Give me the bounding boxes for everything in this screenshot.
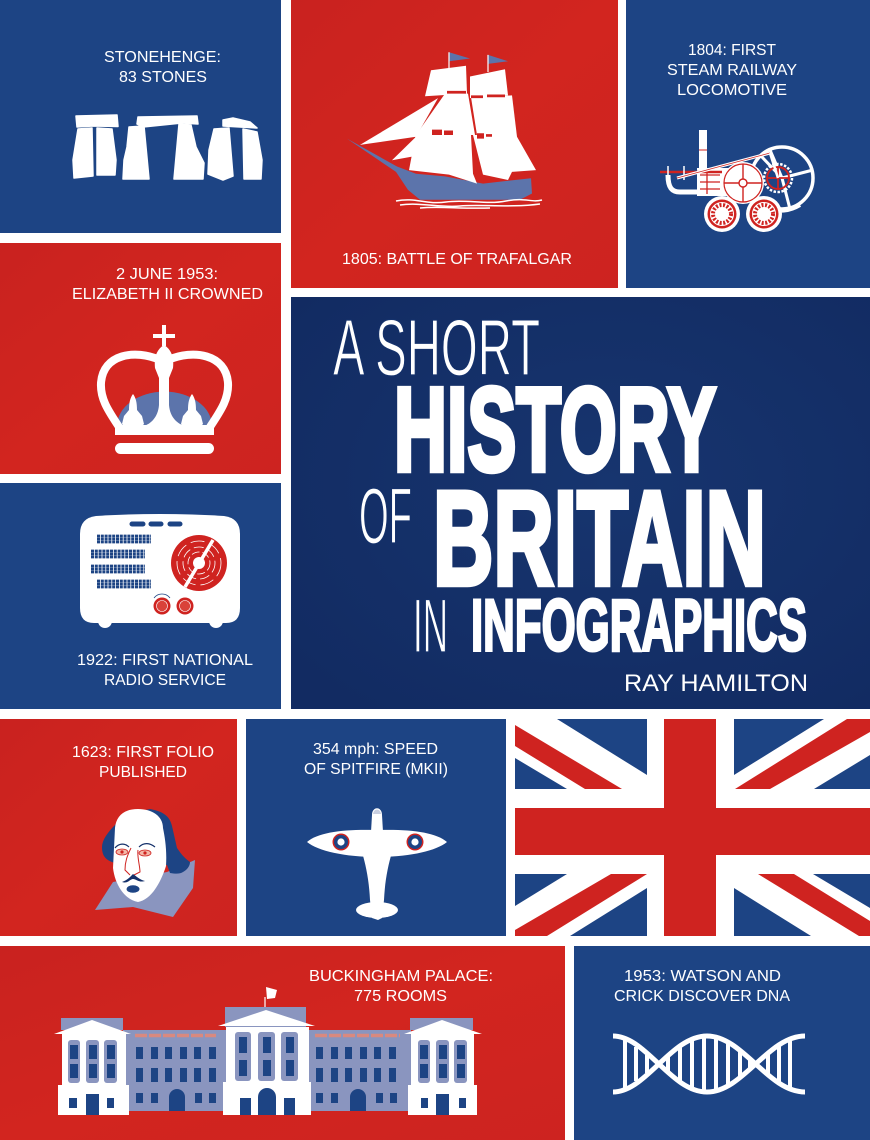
panel: Battle of Trafalgar	[291, 0, 618, 288]
title: A SHORT	[333, 303, 540, 392]
panel: Spitfire	[246, 719, 506, 936]
heading: DNA	[614, 968, 790, 1005]
icon: radio	[80, 514, 240, 628]
heading: Spitfire: OF SPITFIRE (MKII)	[304, 761, 448, 778]
panel: title	[291, 297, 870, 709]
heading: DNA: CRICK DISCOVER DNA	[614, 988, 790, 1005]
heading: radio	[77, 652, 253, 689]
heading: Spitfire	[304, 741, 448, 778]
title: IN	[413, 584, 448, 669]
heading: radio: 1922: FIRST NATIONAL	[77, 652, 253, 669]
heading: locomotive: 1804: FIRST	[688, 42, 776, 59]
icon: crown	[101, 325, 228, 454]
heading: folio	[72, 744, 214, 781]
heading: coronation	[72, 266, 263, 303]
panel: First Folio	[0, 719, 237, 936]
panel: Union Jack flag	[515, 719, 870, 936]
panel: steam locomotive	[626, 0, 870, 288]
heading: DNA: 1953: WATSON AND	[624, 968, 781, 985]
heading: coronation: ELIZABETH II CROWNED	[72, 286, 263, 303]
red crosses	[515, 719, 870, 936]
heading: locomotive: STEAM RAILWAY	[667, 62, 797, 79]
heading: folio: PUBLISHED	[99, 764, 187, 781]
panel: Stonehenge	[0, 0, 281, 233]
icon: DNA helix	[613, 1036, 805, 1092]
icon: Spitfire plane	[307, 808, 447, 920]
heading: folio: 1623: FIRST FOLIO	[72, 744, 214, 761]
author: RAY HAMILTON	[624, 670, 808, 697]
heading: palace: BUCKINGHAM PALACE:	[309, 968, 493, 985]
icon: Stonehenge stones	[73, 115, 262, 180]
heading: palace	[309, 968, 493, 1005]
panel: coronation	[0, 243, 281, 474]
heading: radio: RADIO SERVICE	[104, 672, 226, 689]
heading: locomotive	[667, 42, 797, 99]
panel: DNA	[574, 946, 870, 1140]
heading: palace: 775 ROOMS	[354, 988, 447, 1005]
heading: Stonehenge: STONEHENGE:	[104, 49, 221, 66]
blue fields	[515, 719, 870, 936]
heading: coronation: 2 JUNE 1953:	[116, 266, 218, 283]
heading: Trafalgar: 1805: BATTLE OF TRAFALGAR	[342, 251, 572, 268]
panel: Buckingham Palace	[0, 946, 565, 1140]
panel: radio	[0, 483, 281, 709]
icon: waves	[396, 200, 542, 208]
heading: locomotive: LOCOMOTIVE	[677, 82, 787, 99]
title: OF	[359, 471, 412, 560]
icon: locomotive	[660, 130, 813, 232]
icon: sailing ship	[347, 52, 536, 200]
icon: Shakespeare	[95, 809, 195, 917]
heading: Stonehenge	[104, 49, 221, 86]
icon: palace	[54, 987, 482, 1115]
heading: Stonehenge: 83 STONES	[119, 69, 207, 86]
heading: Spitfire: 354 mph: SPEED	[313, 741, 438, 758]
title	[333, 303, 807, 669]
